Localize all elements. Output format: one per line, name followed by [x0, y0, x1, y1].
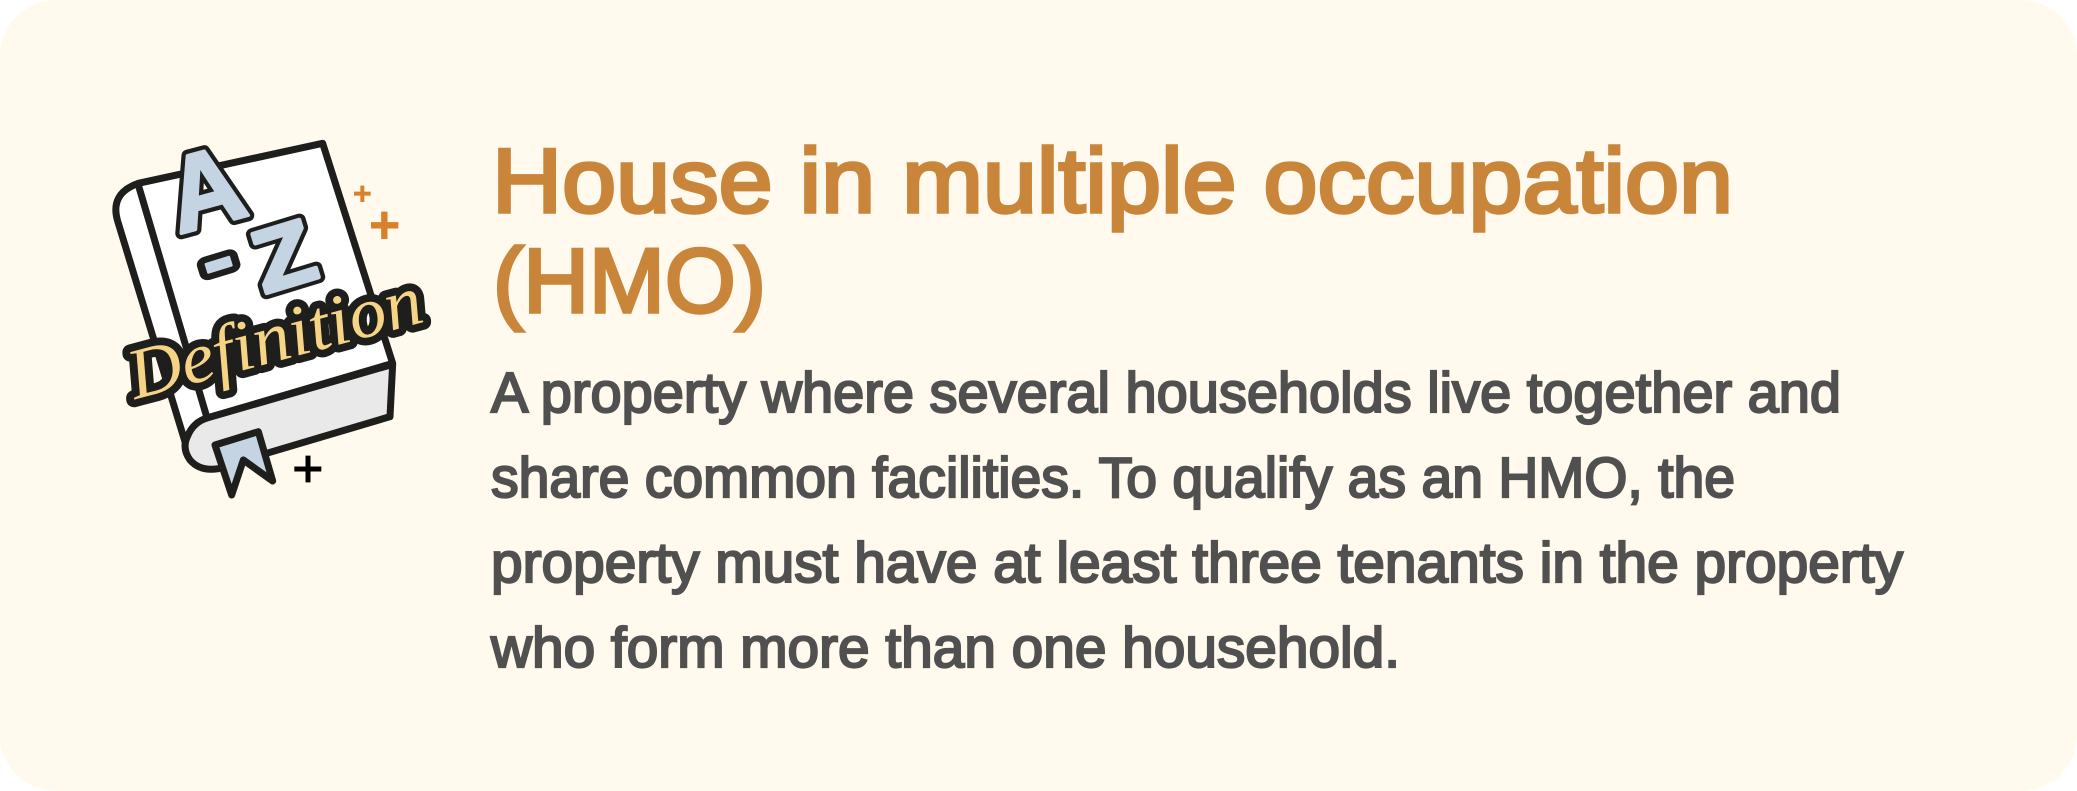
book spine line	[138, 185, 207, 417]
sparkle: small orange plus	[354, 186, 371, 202]
body line 3: property must have at least three tenants in the property	[491, 531, 1903, 595]
definition body text	[490, 361, 1903, 680]
icon: definition book	[116, 121, 431, 495]
hyphen: -	[189, 214, 245, 305]
letter Z: Z	[241, 200, 327, 312]
sparkle: large orange plus	[371, 212, 398, 239]
body line 2: share common facilities. To qualify as an HMO, the	[491, 446, 1735, 510]
sparkle: black plus	[294, 456, 321, 482]
book cover	[116, 143, 393, 445]
title line 2: (HMO)	[493, 231, 766, 332]
letter A: A	[154, 121, 257, 256]
book pages	[185, 364, 393, 469]
body line 4: who form more than one household.	[490, 616, 1400, 680]
definition script label: Definition	[117, 259, 431, 415]
letter A: A	[154, 121, 257, 256]
bookmark	[215, 432, 273, 495]
letter Z: Z	[241, 200, 327, 312]
title	[492, 131, 1733, 332]
hyphen: -	[189, 214, 245, 305]
title line 1: House in multiple occupation	[492, 131, 1733, 232]
body line 1: A property where several households live together and	[491, 361, 1841, 425]
